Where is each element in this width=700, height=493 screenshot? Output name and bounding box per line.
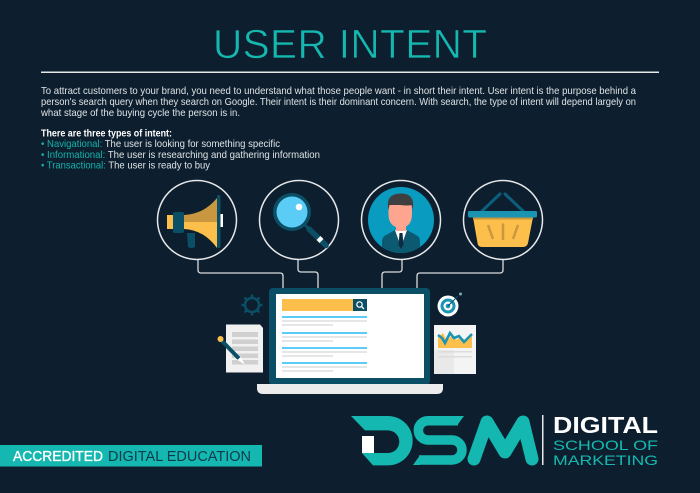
laptop with search results bbox=[257, 288, 443, 394]
intro paragraph: what stage of the buying cycle the person is in. bbox=[40, 108, 240, 119]
icon: document with pencil bbox=[218, 324, 263, 372]
banner: accredited digital education: DIGITAL EDUCATION bbox=[108, 449, 251, 465]
logo: DSM Digital School of Marketing: MARKETING bbox=[553, 452, 658, 468]
logo: DSM Digital School of Marketing: DIGITAL bbox=[553, 412, 658, 438]
intent types list bbox=[41, 128, 320, 172]
intent types list: • Informational: The user is researching and gathering information bbox=[41, 150, 320, 161]
icon: target bbox=[438, 292, 462, 316]
title: USER INTENT bbox=[213, 21, 487, 67]
intro paragraph bbox=[40, 86, 636, 119]
banner: accredited digital education: ACCREDITED bbox=[13, 449, 103, 465]
intent types list: • Transactional: The user is ready to buy bbox=[41, 160, 211, 172]
icon: gear bbox=[242, 294, 262, 316]
icon: megaphone bbox=[158, 180, 236, 260]
intro paragraph: To attract customers to your brand, you need to understand what those people want - in short their intent. User intent is the purpose behind a bbox=[41, 86, 636, 97]
icon: magnifying glass bbox=[260, 180, 338, 260]
logo: DSM Digital School of Marketing bbox=[351, 412, 658, 468]
logo: DSM Digital School of Marketing: SCHOOL OF bbox=[553, 437, 658, 453]
intent types list: • Navigational: The user is looking for something specific bbox=[41, 139, 280, 150]
intro paragraph: person's search query when they search on Google. Their intent is their dominant concern. With search, the type of intent will depend largely on bbox=[41, 97, 636, 108]
intent types list: There are three types of intent: bbox=[41, 128, 172, 140]
banner: accredited digital education bbox=[0, 445, 262, 466]
connector lines bbox=[198, 260, 503, 288]
icon: report chart bbox=[434, 325, 476, 374]
icon: shopping basket bbox=[464, 180, 542, 260]
icon: businessman bbox=[362, 180, 440, 260]
